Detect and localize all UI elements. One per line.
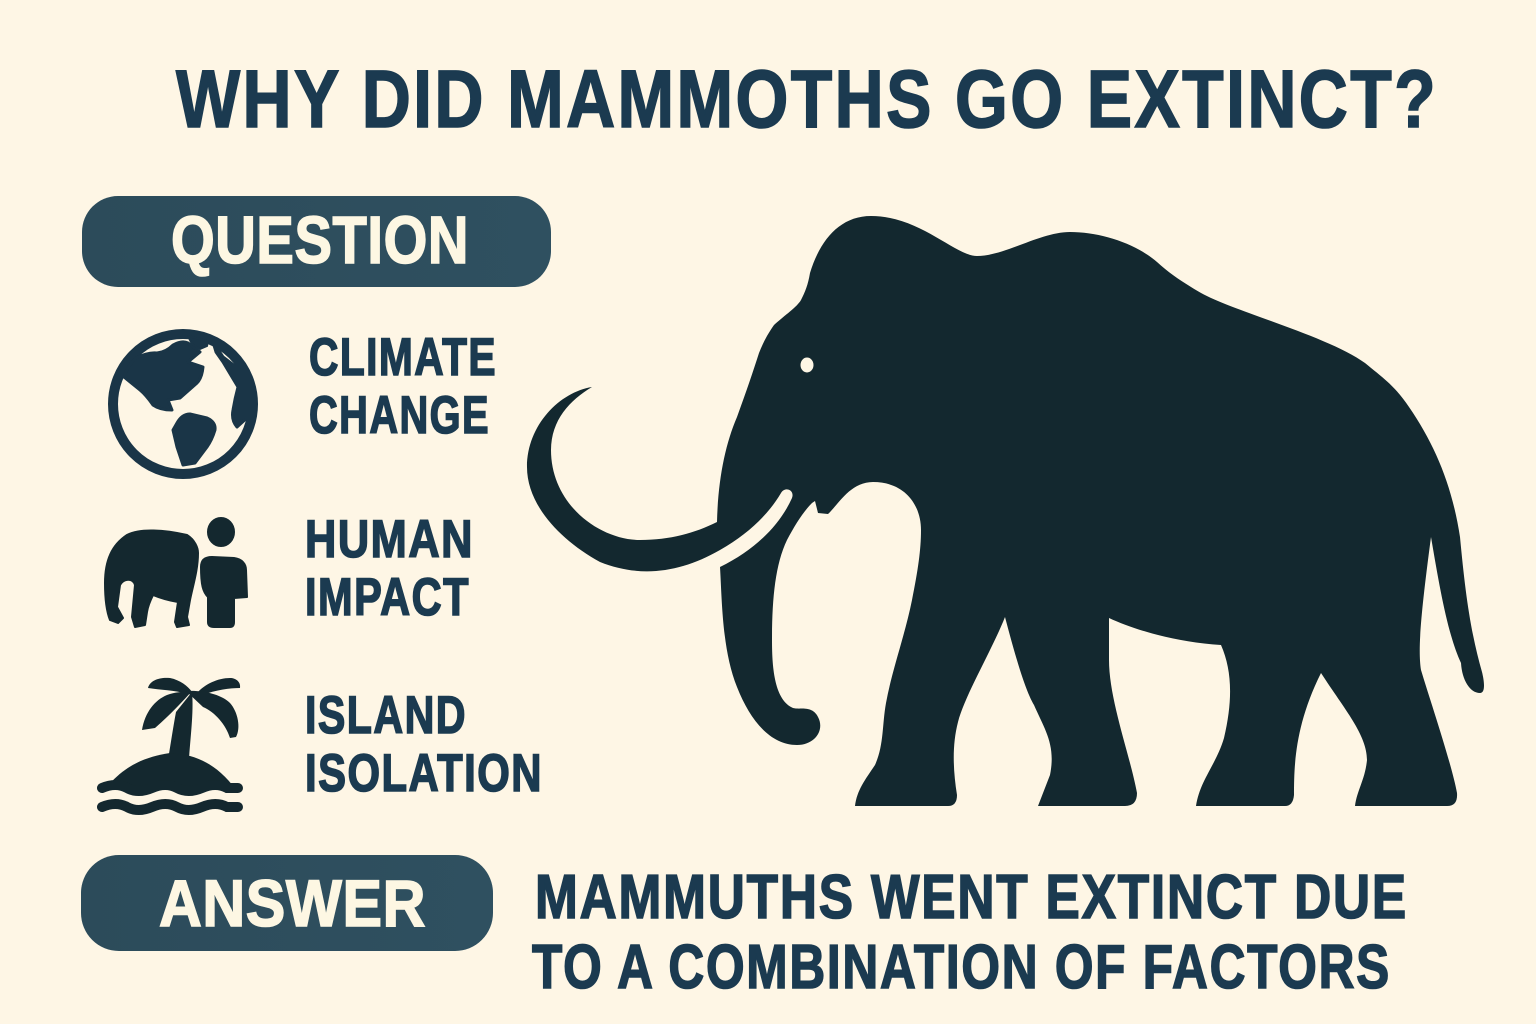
question pill: QUESTION — [171, 203, 469, 278]
answer text — [532, 863, 1408, 1002]
label: island isolation: ISLAND — [305, 686, 467, 745]
label: climate change: CHANGE — [309, 386, 490, 445]
label: island isolation: ISOLATION — [305, 744, 543, 803]
mammoth silhouette — [527, 216, 1484, 806]
label: climate change — [309, 328, 497, 445]
icon: palm island — [102, 678, 240, 810]
icon: elephant and person — [105, 518, 247, 627]
label: human impact: IMPACT — [305, 568, 470, 627]
answer pill: ANSWER — [159, 866, 426, 940]
label: island isolation — [305, 686, 543, 803]
label: human impact: HUMAN — [305, 510, 474, 569]
label: climate change: CLIMATE — [309, 328, 497, 387]
icon: globe — [113, 334, 253, 474]
answer pill — [81, 855, 493, 951]
question pill — [82, 196, 551, 287]
label: human impact — [305, 510, 474, 627]
